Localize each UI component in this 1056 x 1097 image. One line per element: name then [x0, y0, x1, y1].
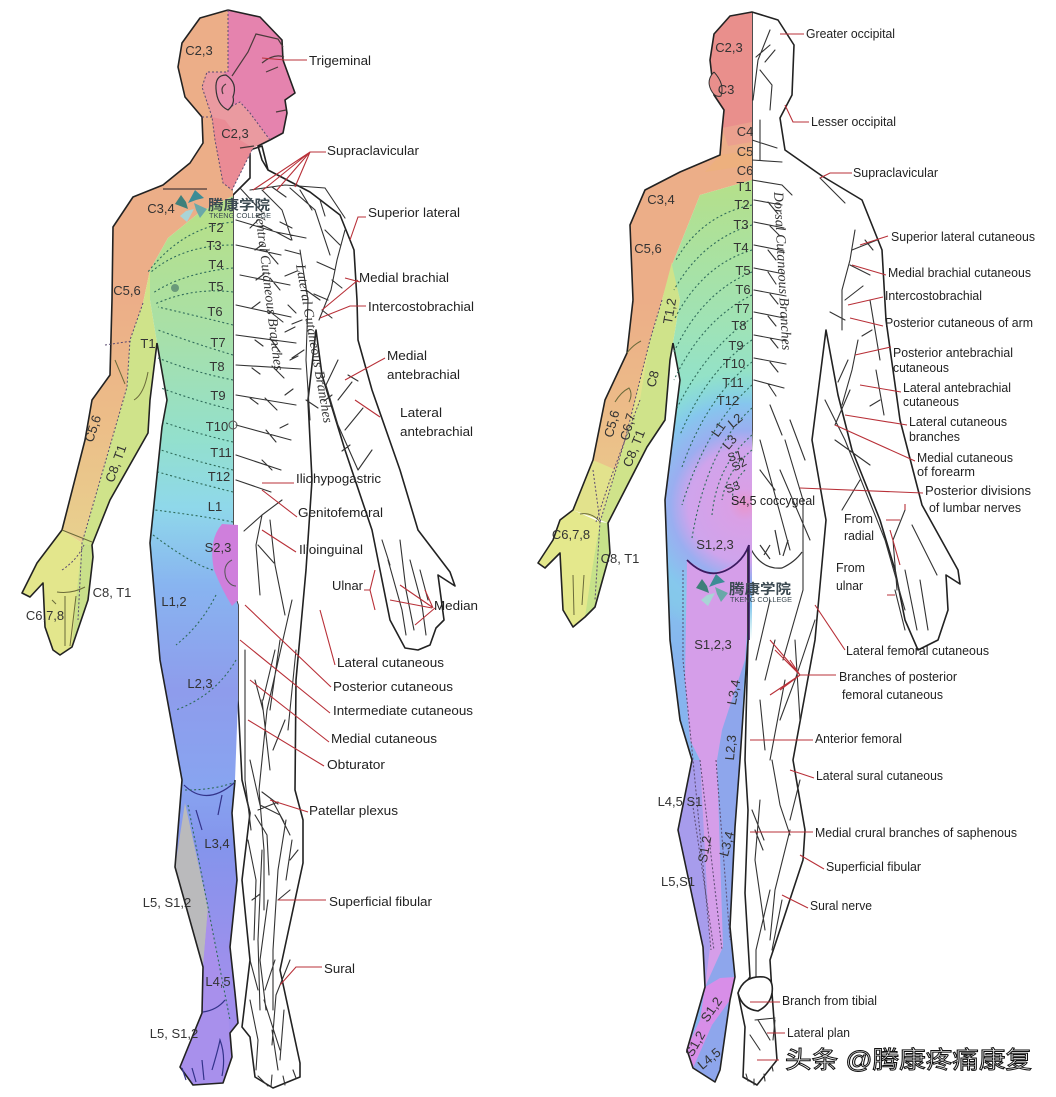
- logo: posterior Tkeng College: TKENG COLLEGE: [730, 595, 792, 604]
- posterior dermatome labels: T10: [723, 356, 745, 371]
- posterior dermatome labels: S1,2: [697, 994, 725, 1025]
- anterior dermatome labels: T9: [210, 388, 226, 403]
- sacral radial bands: [666, 380, 752, 638]
- posterior nerve labels: Medial brachial cutaneous: [888, 265, 1031, 280]
- L4,5 lighter purple: [180, 908, 232, 1085]
- anterior right half outline with nerves: [233, 146, 455, 1088]
- posterior nerve labels: Branch from tibial: [782, 993, 877, 1008]
- trigeminal pink region: [218, 10, 295, 140]
- anterior nerve labels: Lateral cutaneous: [337, 655, 445, 670]
- posterior dermatome labels: [552, 40, 815, 1072]
- posterior dermatome labels: S1: [726, 447, 744, 465]
- heel and sole: [738, 977, 772, 1011]
- posterior dermatome labels: T2: [734, 197, 750, 212]
- posterior dermatome labels: C6: [737, 163, 753, 178]
- anterior dermatome labels: T1: [140, 336, 156, 351]
- ankle and toe S1,2: [700, 977, 735, 1025]
- posterior dermatome labels: L2: [725, 410, 745, 431]
- anterior dermatome labels: T2: [208, 220, 224, 235]
- posterior dermatome labels: T6: [735, 282, 751, 297]
- S1,2,3 purple thigh strip: [685, 547, 748, 987]
- posterior leader lines: [750, 34, 923, 1060]
- anterior nerve labels: Trigeminal: [309, 53, 371, 68]
- anterior dermatome labels: S2,3: [205, 540, 231, 555]
- anterior dermatome labels: L1,2: [161, 594, 187, 609]
- posterior nerve labels: branches: [909, 429, 960, 444]
- arm outline: [22, 300, 157, 655]
- S2,3 genital purple: [212, 524, 238, 606]
- posterior nerve labels: Posterior cutaneous of arm: [885, 315, 1033, 330]
- posterior dermatome labels: S1,2,3: [694, 637, 732, 652]
- anterior dermatome labels: C2,3: [221, 126, 249, 141]
- anterior nerve labels: Supraclavicular: [327, 143, 420, 158]
- anterior dermatome labels: T7: [210, 335, 226, 350]
- contour lines posterior: [674, 205, 752, 538]
- posterior nerve labels: Lateral plan: [787, 1025, 850, 1040]
- posterior dermatome labels: T1,2: [660, 297, 679, 325]
- anterior dermatome labels: T3: [206, 238, 222, 253]
- figure: posterior body: [538, 12, 960, 1085]
- posterior nerve labels: femoral cutaneous: [842, 687, 943, 702]
- anterior dermatome labels: C5,6: [113, 283, 141, 298]
- posterior dermatome labels: T5: [735, 263, 751, 278]
- anterior leader lines: [240, 58, 435, 985]
- posterior nerve labels: Branches of posterior: [839, 669, 958, 684]
- posterior nerve labels: cutaneous: [893, 360, 949, 375]
- anterior nerve labels: Sural: [324, 961, 355, 976]
- posterior dermatome labels: T3: [733, 217, 749, 232]
- posterior dermatome labels: C4: [737, 124, 753, 139]
- anterior nerve labels: Iliohypogastric: [296, 471, 381, 486]
- posterior nerve labels: Greater occipital: [806, 26, 895, 41]
- posterior dermatome labels: S1,2: [695, 835, 714, 864]
- anterior dermatome labels: L4,5: [205, 974, 231, 989]
- anterior nerve labels: Genitofemoral: [298, 505, 383, 520]
- grey lateral calf: [175, 803, 208, 967]
- anterior dermatome labels: L3,4: [204, 836, 230, 851]
- anterior nerve labels: Posterior cutaneous: [333, 679, 454, 694]
- posterior nerve labels: Intercostobrachial: [885, 288, 982, 303]
- posterior dermatome labels: T7: [734, 301, 750, 316]
- anterior nerve labels: [296, 53, 478, 976]
- posterior nerve labels: From: [844, 511, 873, 526]
- posterior dermatome labels: C8, T1: [620, 428, 648, 469]
- posterior dermatome labels: C5,6: [634, 241, 662, 256]
- anterior nerve labels: Medial brachial: [359, 270, 449, 285]
- figure: anterior body: [22, 10, 455, 1088]
- posterior dermatome labels: T11: [722, 375, 744, 390]
- anterior dermatome labels: T4: [208, 257, 224, 272]
- posterior dermatome labels: T1: [736, 179, 752, 194]
- posterior nerve labels: Medial crural branches of saphenous: [815, 825, 1017, 840]
- posterior dermatome labels: T8: [731, 318, 747, 333]
- posterior vertical section title: Dorsal Cutaneous Branches: [770, 190, 793, 351]
- posterior dermatome labels: T12: [717, 393, 739, 408]
- posterior dermatome labels: S2: [729, 455, 749, 474]
- anterior nerve labels: antebrachial: [400, 424, 473, 439]
- posterior dermatome labels: C3: [718, 82, 734, 97]
- posterior nerve labels: cutaneous: [903, 394, 959, 409]
- posterior nerve labels: Lateral antebrachial: [903, 380, 1011, 395]
- anterior nerve labels: Obturator: [327, 757, 386, 772]
- logo: posterior Tkeng College: 腾康学院: [729, 581, 791, 597]
- anterior nerve labels: Superior lateral: [368, 205, 460, 220]
- anterior dermatome labels: L2,3: [187, 676, 213, 691]
- anterior nerve labels: Ulnar: [332, 578, 364, 593]
- posterior dermatome labels: T4: [733, 240, 749, 255]
- logo: anterior Tkeng College: TKENG COLLEGE: [209, 211, 271, 220]
- ear, hair and face details: [216, 75, 234, 110]
- anterior dermatome labels: C5,6: [81, 413, 104, 444]
- anterior dermatome labels: T12: [208, 469, 230, 484]
- posterior dermatome labels: L4,5 S1: [658, 794, 702, 809]
- calf purple blue: [678, 760, 710, 987]
- anterior dermatome labels: T11: [210, 445, 232, 460]
- posterior dermatome labels: L3: [719, 432, 740, 452]
- anterior nerve labels: Medial cutaneous: [331, 731, 438, 746]
- posterior dermatome labels: C3,4: [647, 192, 675, 207]
- anterior nerve labels: Medial: [387, 348, 427, 363]
- posterior nerve labels: Lesser occipital: [811, 114, 896, 129]
- posterior nerve labels: Superficial fibular: [826, 859, 922, 874]
- anterior nerve labels: Median: [434, 598, 478, 613]
- posterior nerve labels: Lateral femoral cutaneous: [846, 643, 989, 658]
- lower leg blue: [693, 640, 745, 1082]
- anterior dermatome labels: [26, 43, 249, 1041]
- anterior dermatome labels: C8, T1: [93, 585, 131, 600]
- posterior dermatome labels: L1: [708, 419, 729, 440]
- posterior dermatome labels: S1,2,3: [696, 537, 734, 552]
- posterior nerve labels: of lumbar nerves: [929, 500, 1021, 515]
- posterior dermatome labels: L5,S1: [661, 874, 695, 889]
- salmon neck: [202, 72, 270, 190]
- toes anterior: [258, 1070, 296, 1087]
- anterior dermatome labels: C8, T1: [102, 443, 129, 484]
- posterior dermatome labels: T9: [728, 338, 744, 353]
- anterior vertical section titles: Ventral Cutaneous Branches: [251, 211, 286, 372]
- posterior dermatome labels: C6,7: [617, 412, 638, 442]
- posterior nerve labels: From: [836, 560, 865, 575]
- anterior nerve labels: Superficial fibular: [329, 894, 433, 909]
- posterior dermatome labels: S4,5 coccygeal: [731, 494, 815, 508]
- anterior nerve labels: Ilioinguinal: [299, 542, 363, 557]
- logo: posterior Tkeng College: [696, 574, 792, 606]
- anterior dermatome labels: T6: [207, 304, 223, 319]
- anterior nerve labels: Intermediate cutaneous: [333, 703, 474, 718]
- posterior nerve labels: Posterior divisions: [925, 483, 1031, 498]
- orange shoulder and upper arm posterior: [593, 122, 752, 490]
- anterior dermatome labels: L5, S1,2: [150, 1026, 198, 1041]
- torso and leg gradient: [150, 196, 238, 1085]
- posterior nerve labels: radial: [844, 528, 874, 543]
- posterior nerve labels: ulnar: [836, 578, 864, 593]
- watermark: 头条 @腾康疼痛康复: [785, 1047, 1032, 1074]
- anterior dermatome labels: C2,3: [185, 43, 213, 58]
- logo: anterior Tkeng College: [175, 190, 271, 222]
- posterior nerve labels: Medial cutaneous: [917, 450, 1013, 465]
- posterior forearm and hand regions: [600, 262, 680, 523]
- back and leg gradient: [665, 180, 752, 1082]
- anterior dermatome labels: T5: [208, 279, 224, 294]
- contour lines: [148, 222, 236, 1020]
- posterior nerve labels: Lateral cutaneous: [909, 414, 1007, 429]
- head outline and dashes: [112, 10, 295, 300]
- posterior dermatome labels: L4,5: [695, 1045, 724, 1072]
- posterior right half outline with nerves: [738, 12, 960, 1085]
- anterior dermatome labels: L1: [208, 499, 222, 514]
- anterior vertical section titles: Lateral Cutaneous Branches: [292, 262, 335, 425]
- posterior dermatome labels: C8: [643, 369, 662, 389]
- posterior dermatome labels: C6,7,8: [552, 527, 590, 542]
- posterior dermatome labels: L2,3: [722, 734, 739, 761]
- posterior dermatome labels: S1,2: [682, 1028, 708, 1059]
- inner arm yellow green: [82, 270, 157, 545]
- anterior nerve labels: Lateral: [400, 405, 442, 420]
- anterior dermatome labels: C6,7,8: [26, 608, 64, 623]
- anterior dermatome labels: T8: [209, 359, 225, 374]
- anterior dermatome labels: L5, S1,2: [143, 895, 191, 910]
- posterior nerve labels: Supraclavicular: [853, 165, 939, 180]
- posterior nerve labels: Lateral sural cutaneous: [816, 768, 943, 783]
- nerve branches posterior: [750, 30, 937, 1050]
- nerve branches anterior: [236, 185, 428, 1070]
- posterior nerve labels: [782, 26, 1035, 1040]
- anterior nerve labels: Patellar plexus: [309, 803, 399, 818]
- posterior dermatome labels: S3: [723, 478, 742, 496]
- posterior nerve labels: Sural nerve: [810, 898, 872, 913]
- head and neck posterior: [710, 12, 752, 130]
- outline of posterior leg: [665, 343, 748, 1082]
- posterior dermatome labels: L3,4: [716, 830, 737, 858]
- hand: [22, 530, 93, 655]
- posterior nerve labels: of forearm: [917, 464, 975, 479]
- posterior nerve labels: Posterior antebrachial: [893, 345, 1013, 360]
- anterior dermatome labels: T10: [206, 419, 228, 434]
- posterior arm outline: [538, 300, 673, 627]
- posterior nerve labels: Anterior femoral: [815, 731, 902, 746]
- logo: anterior Tkeng College: 腾康学院: [208, 197, 270, 213]
- posterior dermatome labels: C5: [737, 144, 753, 159]
- torso and leg outline: [150, 343, 238, 1085]
- anterior vertical section titles: [251, 211, 335, 425]
- posterior dermatome labels: L3,4: [724, 678, 743, 706]
- orange shoulder, neck and upper arm: [62, 10, 233, 543]
- anterior nerve labels: Intercostobrachial: [368, 299, 474, 314]
- posterior dermatome labels: C8, T1: [601, 551, 639, 566]
- anterior nerve labels: antebrachial: [387, 367, 460, 382]
- posterior nerve labels: Superior lateral cutaneous: [891, 229, 1035, 244]
- posterior dermatome labels: C5,6: [601, 409, 622, 439]
- posterior dermatome labels: C2,3: [715, 40, 743, 55]
- anterior dermatome labels: C3,4: [147, 201, 175, 216]
